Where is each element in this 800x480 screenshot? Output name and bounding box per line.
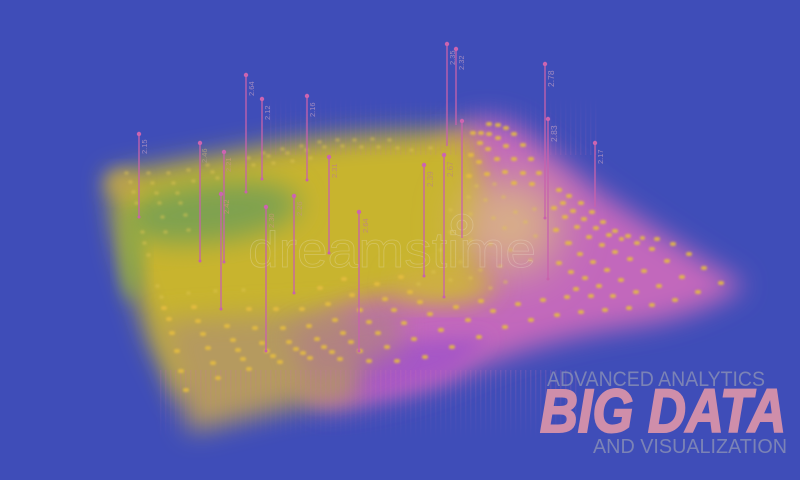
pin 2.15 — [137, 132, 149, 218]
pin 2.12 — [260, 97, 272, 180]
pin 2.67 — [442, 153, 455, 298]
infographic canvas — [90, 42, 786, 453]
pin 2.12: 2.12 — [263, 105, 272, 120]
surface: orange left tip — [106, 172, 138, 194]
pin 2.21: 2.21 — [224, 157, 233, 172]
pin 2.26: 2.26 — [295, 201, 304, 216]
subtitle top: ADVANCED ANALYTICS — [547, 368, 765, 391]
pin 2.31 — [327, 155, 339, 254]
pin 2.46: 2.46 — [200, 148, 209, 163]
pin 2.78: 2.78 — [546, 70, 556, 87]
pin 2.42 — [219, 192, 231, 310]
pin 2.78 — [543, 62, 556, 219]
pin 2.64 lower: 2.64 — [361, 218, 370, 233]
pin 2.35 — [445, 42, 457, 146]
surface: left green edge — [122, 220, 142, 300]
pin 2.39 — [422, 163, 435, 278]
grid of data points — [126, 124, 722, 390]
subtitle bottom: AND VISUALIZATION — [593, 436, 787, 458]
surface: yellow main — [108, 132, 490, 400]
surface: lower left tan — [160, 310, 355, 432]
bright points — [163, 124, 722, 390]
surface: yellow core near centre — [395, 267, 495, 303]
pin 2.64 — [244, 73, 256, 194]
pin 2.30 — [264, 205, 276, 352]
data surface: colour field — [106, 119, 745, 432]
pin 2.83: 2.83 — [549, 125, 559, 142]
surface: olive green patch — [117, 173, 303, 251]
pin 2.32 — [454, 47, 466, 125]
pin 2.32: 2.32 — [457, 55, 466, 70]
pin 2.21 — [222, 150, 233, 264]
pin 2.16: 2.16 — [308, 102, 317, 117]
faint points — [126, 139, 536, 297]
watermark: dreamstime — [248, 222, 536, 278]
pin 2.64 lower — [357, 210, 370, 352]
pin 2.31: 2.31 — [330, 163, 339, 178]
vertical stripe fades around the surface — [160, 122, 596, 418]
surface: lower purple band — [290, 338, 490, 400]
pin 2.16 — [305, 94, 317, 182]
pin 2.30: 2.30 — [267, 213, 276, 228]
pin 2.83 — [546, 117, 559, 280]
title block — [540, 368, 787, 458]
pin 2.17: 2.17 — [596, 149, 605, 164]
data pins with values — [137, 42, 605, 353]
pin 2.39: 2.39 — [426, 171, 435, 187]
pin 2.46 — [198, 141, 209, 262]
surface: purple-pink base — [280, 119, 745, 408]
pin 2.15: 2.15 — [140, 139, 149, 154]
pin 2.42: 2.42 — [222, 199, 231, 214]
surface: tan pink transition — [290, 305, 400, 395]
pin 2.26 — [292, 194, 304, 294]
surface: central tan highlight — [460, 177, 560, 273]
pin 2.17 — [593, 141, 605, 207]
pin 2.64: 2.64 — [247, 81, 256, 96]
pin 2.67: 2.67 — [446, 161, 455, 177]
pin centre — [460, 119, 464, 238]
pin 2.35: 2.35 — [448, 50, 457, 65]
